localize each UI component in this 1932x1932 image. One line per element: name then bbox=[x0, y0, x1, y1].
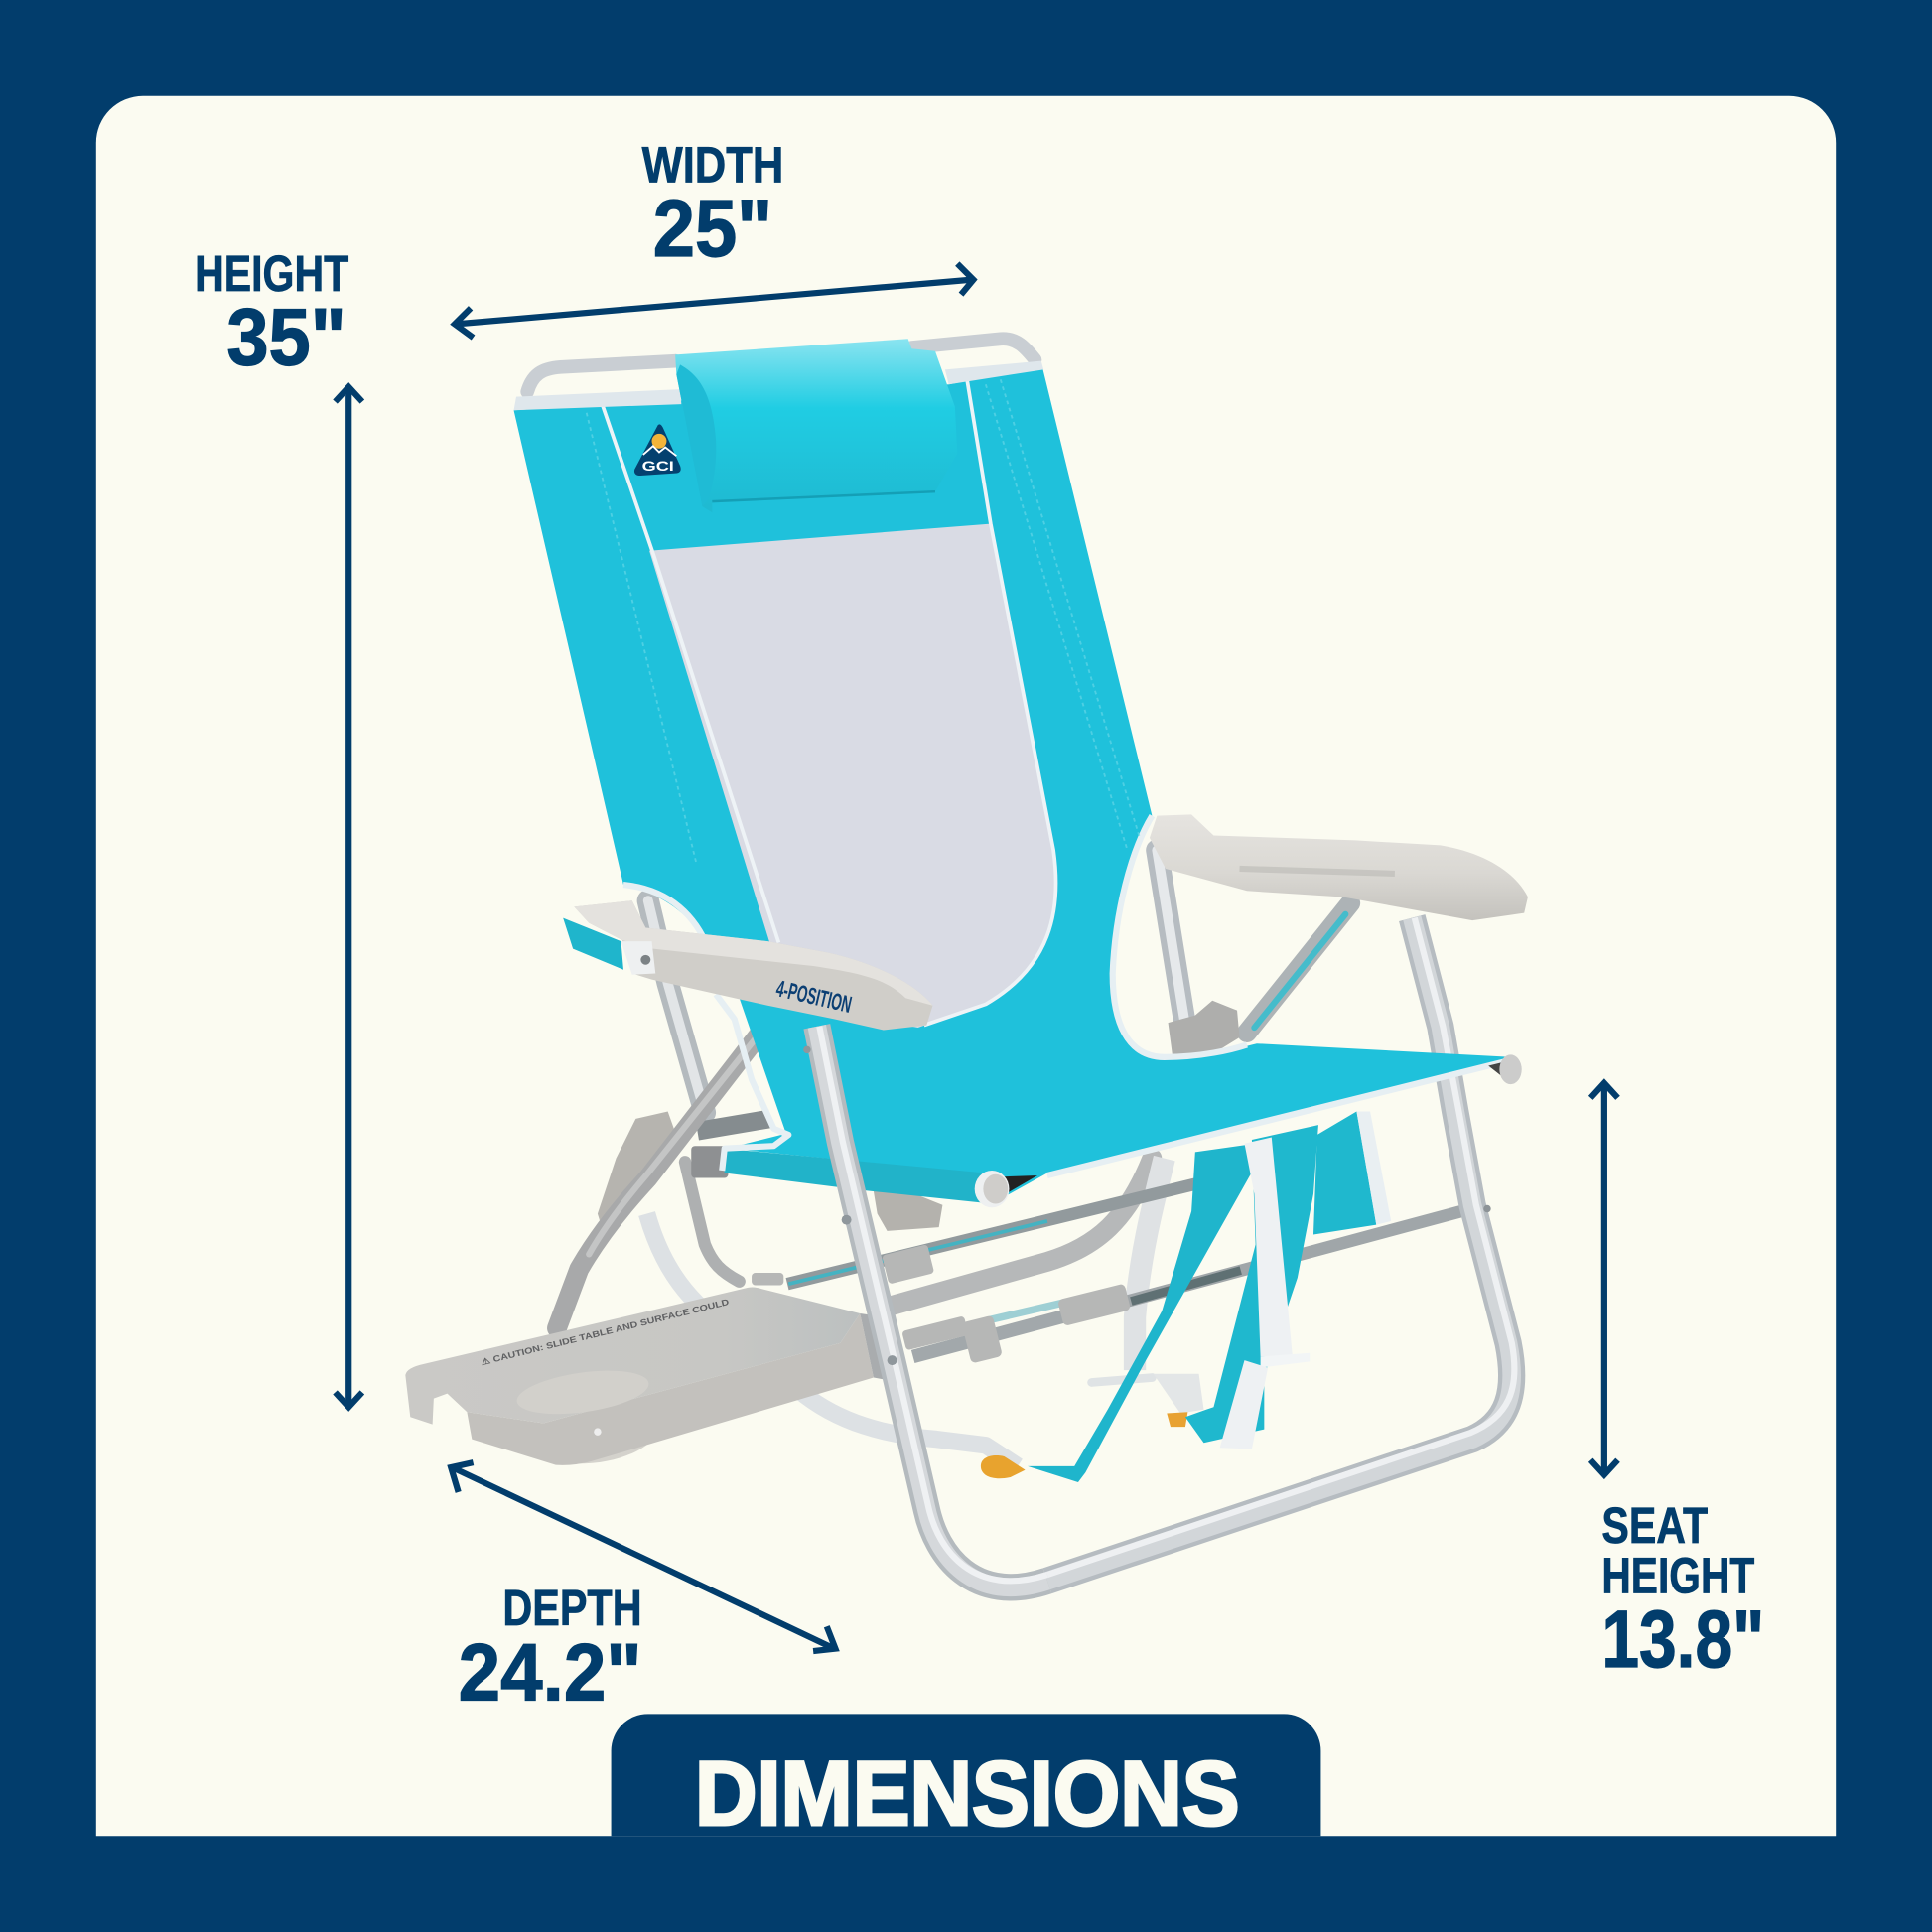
arrow: height bbox=[336, 387, 362, 1407]
dimensions tab bbox=[612, 1714, 1320, 1845]
rear frame tubes bbox=[648, 850, 1350, 1309]
binding bbox=[623, 816, 1513, 1175]
label: height: HEIGHT bbox=[195, 245, 348, 302]
side table bbox=[405, 1288, 888, 1465]
table side face bbox=[467, 1313, 874, 1465]
arrow: seat height bbox=[1590, 1083, 1618, 1475]
table screw bbox=[594, 1428, 602, 1436]
frame bolt bbox=[1483, 1205, 1491, 1212]
pocket bbox=[1313, 1111, 1391, 1235]
label: seat height: SEAT bbox=[1601, 1497, 1708, 1554]
top binding bbox=[514, 361, 1043, 410]
seat tube end bbox=[975, 1171, 1037, 1207]
chair fabric bbox=[514, 367, 1513, 1204]
arrow: width bbox=[455, 264, 973, 338]
cross bar clamps bbox=[752, 1244, 1131, 1363]
teal straps bbox=[1028, 1125, 1318, 1482]
label: height bbox=[195, 245, 348, 382]
chair illustration bbox=[405, 339, 1528, 1587]
seat clamp bbox=[873, 1184, 942, 1231]
seat tube end right bbox=[1488, 1054, 1522, 1084]
table right connector bbox=[860, 1313, 888, 1380]
buckle bbox=[981, 1455, 1026, 1478]
cup holder bbox=[514, 1363, 651, 1421]
stitching bbox=[587, 379, 1140, 863]
leg bolts bbox=[803, 1046, 897, 1365]
label: width: 25" bbox=[653, 184, 772, 274]
gci logo bbox=[634, 424, 681, 476]
diagonal left brace bbox=[557, 1016, 773, 1328]
label: seat height: 13.8" bbox=[1601, 1594, 1764, 1685]
arrow: depth bbox=[451, 1462, 835, 1651]
label: depth bbox=[459, 1580, 642, 1719]
arm strap tab bbox=[621, 941, 655, 975]
mesh panel bbox=[649, 523, 1056, 1028]
teal flap bbox=[563, 918, 623, 970]
right armrest bbox=[1150, 814, 1528, 920]
left hinge bbox=[598, 1111, 675, 1230]
label: width: WIDTH bbox=[642, 137, 783, 194]
left armrest bbox=[574, 900, 932, 1031]
arm bolt bbox=[640, 955, 650, 965]
top frame tube bbox=[527, 339, 1035, 392]
aluminium front frame bbox=[1047, 918, 1514, 1581]
label: height: 35" bbox=[226, 292, 346, 382]
label: depth: DEPTH bbox=[502, 1580, 642, 1636]
rear straps bbox=[647, 1213, 1018, 1466]
gci logo: GCI bbox=[642, 459, 674, 474]
white vertical strap bbox=[1135, 1159, 1165, 1370]
cross bars bbox=[787, 1184, 1466, 1356]
label: seat height bbox=[1601, 1497, 1764, 1685]
label: width bbox=[642, 137, 783, 274]
strap loop bbox=[1092, 1374, 1204, 1427]
cup holder base bbox=[553, 1440, 653, 1463]
table caution text: ⚠ CAUTION: SLIDE TABLE AND SURFACE COULD bbox=[480, 1297, 730, 1367]
4-position label: 4-POSITION bbox=[774, 975, 854, 1018]
table top face bbox=[405, 1288, 860, 1425]
right hinge bbox=[1169, 1001, 1240, 1059]
left front leg bbox=[817, 1027, 1047, 1587]
label: seat height: HEIGHT bbox=[1601, 1548, 1754, 1604]
dimensions tab: DIMENSIONS bbox=[695, 1743, 1240, 1845]
label: depth: 24.2" bbox=[459, 1628, 642, 1719]
seat bar connector bbox=[691, 1146, 728, 1177]
headrest pillow bbox=[675, 339, 957, 512]
